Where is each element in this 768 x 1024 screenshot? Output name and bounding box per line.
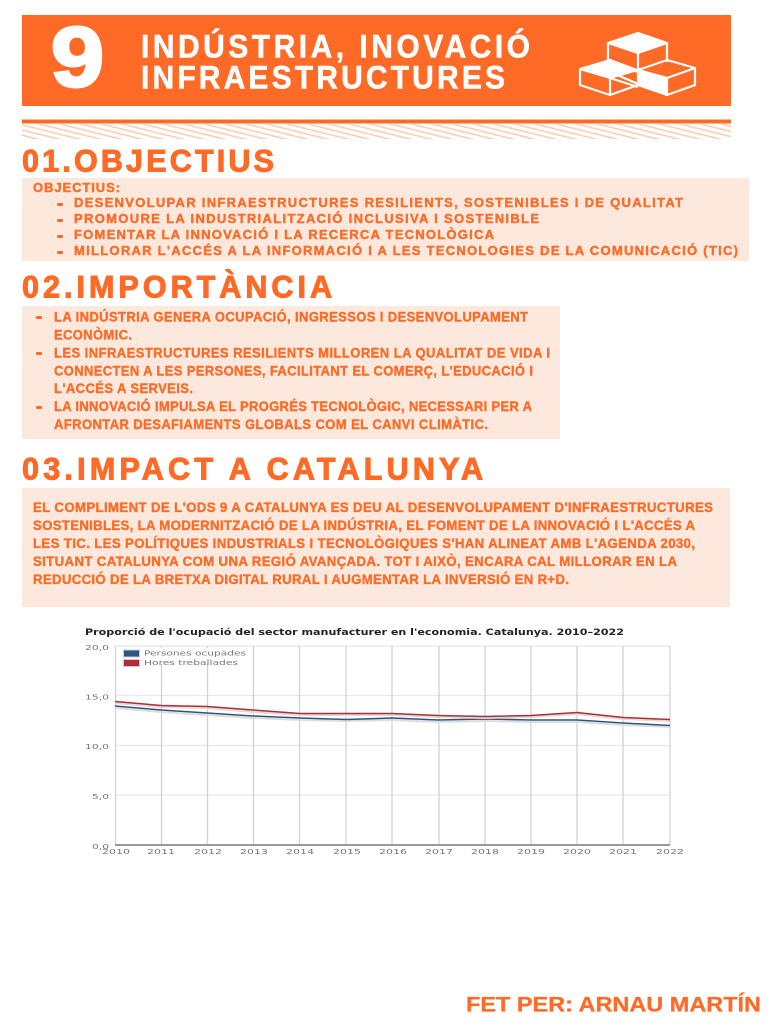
goal number 9: 9: [51, 10, 104, 104]
bullet text: ocupació: [36, 309, 529, 343]
list of objectives: MILLORAR L'ACCÉS A LA INFORMACIÓ I A LES TECNOLOGIES DE LA COMUNICACIÓ (TIC): [74, 243, 738, 258]
y axis labels: 0,0: [92, 843, 109, 851]
paragraph: SOSTENIBLES, LA MODERNITZACIÓ DE LA INDÚSTRIA, EL FOMENT DE LA INNOVACIÓ I L'ACCÉS A: [33, 518, 695, 533]
y axis labels: 15,0: [85, 694, 109, 702]
icon: stacked cubes: [580, 33, 695, 95]
bullet text: infraestructures: [36, 345, 550, 396]
y axis labels: 5,0: [92, 793, 109, 801]
x axis labels: [102, 848, 684, 856]
line: hores treballades: [115, 702, 670, 721]
x axis labels: 2010: [102, 848, 130, 856]
x axis labels: 2021: [609, 848, 637, 856]
list of objectives: PROMOURE LA INDUSTRIALITZACIÓ INCLUSIVA I SOSTENIBLE: [74, 211, 539, 226]
divider bar with hatch: [22, 120, 731, 139]
x axis labels: 2016: [379, 848, 408, 856]
paragraph: EL COMPLIMENT DE L'ODS 9 A CATALUNYA ES DEU AL DESENVOLUPAMENT D'INFRAESTRUCTURES: [33, 500, 713, 515]
paragraph: [33, 500, 713, 587]
header banner: [22, 10, 731, 106]
legend: Persones ocupades: [144, 650, 247, 658]
x axis labels: 2020: [563, 848, 591, 856]
paragraph: LES TIC. LES POLÍTIQUES INDUSTRIALS I TECNOLÒGIQUES S'HAN ALINEAT AMB L'AGENDA 2030,: [33, 536, 695, 551]
bullet text: ocupació: ECONÒMIC.: [54, 327, 132, 343]
x axis labels: 2013: [240, 848, 268, 856]
bullet text: infraestructures: LES INFRAESTRUCTURES RESILIENTS MILLOREN LA QUALITAT DE VIDA I: [54, 345, 550, 361]
x axis labels: 2017: [425, 848, 453, 856]
line chart: [85, 627, 684, 856]
panel: objectius: OBJECTIUS:: [33, 180, 120, 195]
panel: impact a Catalunya: [22, 488, 730, 607]
bullet text: innovació: LA INNOVACIÓ IMPULSA EL PROGRÉS TECNOLÒGIC, NECESSARI PER A: [54, 399, 532, 414]
y axis labels: [85, 644, 109, 851]
paragraph: REDUCCIÓ DE LA BRETXA DIGITAL RURAL I AUGMENTAR LA INVERSIÓ EN R+D.: [33, 572, 569, 587]
list of objectives: FOMENTAR LA INNOVACIÓ I LA RECERCA TECNOLÒGICA: [74, 227, 495, 242]
x axis labels: 2018: [471, 848, 499, 856]
x axis labels: 2019: [517, 848, 545, 856]
x axis labels: 2014: [286, 848, 315, 856]
panel: objectius: [22, 178, 749, 261]
banner title: INFRAESTRUCTURES: [141, 60, 505, 96]
heading: 03 impact a Catalunya: 03.IMPACT A CATALUNYA: [22, 451, 483, 487]
heading: 01 objectius: 01.OBJECTIUS: [22, 143, 274, 179]
bullet text: infraestructures: CONNECTEN A LES PERSONES, FACILITANT EL COMERÇ, L'EDUCACIÓ I: [54, 363, 533, 379]
banner title: [141, 28, 530, 96]
x axis labels: 2011: [147, 848, 175, 856]
y axis labels: 10,0: [85, 743, 109, 751]
list of objectives: DESENVOLUPAR INFRAESTRUCTURES RESILIENTS, SOSTENIBLES I DE QUALITAT: [74, 195, 683, 210]
line: persones ocupades: [115, 706, 670, 727]
footer credit: FET PER: ARNAU MARTÍN: [466, 992, 761, 1016]
x axis labels: 2022: [656, 848, 684, 856]
list of objectives: [57, 195, 738, 258]
y axis labels: 20,0: [85, 644, 109, 652]
bullet text: innovació: AFRONTAR DESAFIAMENTS GLOBALS COM EL CANVI CLIMÀTIC.: [54, 417, 488, 432]
chart title: Proporció de l'ocupació del sector manufacturer en l'economia. Catalunya. 2010–2022: [85, 627, 624, 638]
bullet text: infraestructures: L'ACCÉS A SERVEIS.: [54, 381, 193, 396]
banner title: INDÚSTRIA, INOVACIÓ: [141, 28, 530, 65]
legend: [120, 648, 248, 667]
x axis labels: 2015: [333, 848, 361, 856]
paragraph: SITUANT CATALUNYA COM UNA REGIÓ AVANÇADA. TOT I AIXÒ, ENCARA CAL MILLORAR EN LA: [33, 554, 677, 569]
heading: 02 importància: 02.IMPORTÀNCIA: [22, 269, 332, 305]
x axis labels: 2012: [194, 848, 222, 856]
panel: importància: [22, 306, 560, 439]
bullet text: ocupació: LA INDÚSTRIA GENERA OCUPACIÓ, INGRESSOS I DESENVOLUPAMENT: [54, 309, 529, 325]
legend: Hores treballades: [144, 659, 239, 667]
bullet text: innovació: [36, 399, 532, 432]
